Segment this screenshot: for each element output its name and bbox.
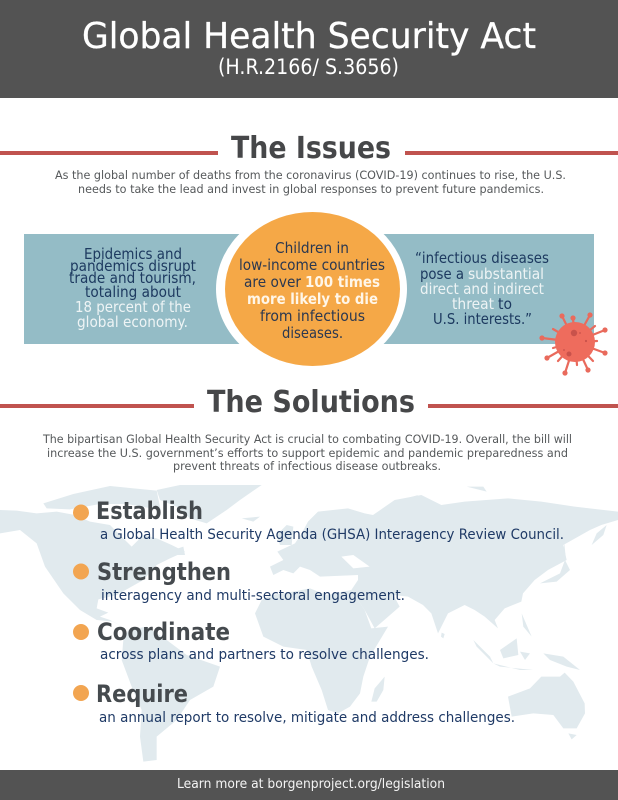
item: Require: Require — [96, 680, 188, 708]
issues intro text: As the global number of deaths from the coronavirus (COVID-19) continues to rise, the U.S. — [55, 168, 566, 182]
text: economy statistic — [69, 246, 196, 331]
panel: issues band — [24, 205, 594, 373]
heading: The Solutions: The Solutions — [207, 385, 415, 420]
item: Establish: a Global Health Security Agenda (GHSA) Interagency Review Council. — [100, 527, 564, 543]
white ring — [216, 205, 407, 373]
solutions intro text: The bipartisan Global Health Security Act is crucial to combating COVID-19. Overall, the bill will — [42, 432, 572, 446]
text: children statistic: are over — [244, 274, 302, 291]
text: threat quote: direct and indirect — [420, 281, 544, 298]
orange circle — [225, 212, 400, 366]
item: Coordinate — [73, 618, 429, 663]
text: economy statistic: trade and tourism, — [69, 270, 196, 287]
world map background — [0, 485, 618, 762]
text: economy statistic: 18 percent of the — [75, 299, 191, 316]
item: Strengthen: interagency and multi-sectoral engagement. — [101, 588, 405, 604]
text: economy statistic: global economy. — [77, 314, 188, 331]
text: threat quote: U.S. interests.” — [433, 311, 532, 328]
text: children statistic: 100 times — [305, 273, 380, 291]
title: Global Health Security Act — [82, 16, 536, 57]
icon: virus — [540, 314, 606, 374]
footer bar: Learn more at borgenproject.org/legislation — [177, 777, 445, 792]
text: children statistic: Children in — [275, 240, 349, 257]
item: Require: an annual report to resolve, mitigate and address challenges. — [99, 710, 515, 726]
text: threat quote — [415, 250, 549, 328]
solutions intro text: prevent threats of infectious disease outbreaks. — [173, 459, 441, 473]
text: economy statistic: pandemics disrupt — [70, 258, 196, 275]
item: Strengthen: Strengthen — [97, 558, 231, 586]
bill numbers subtitle: (H.R.2166/ S.3656) — [218, 55, 399, 79]
text: children statistic: low-income countries — [239, 257, 385, 274]
issues intro text — [55, 168, 566, 196]
heading: The Issues: The Issues — [231, 131, 391, 166]
item: Coordinate: Coordinate — [97, 618, 230, 646]
item: Require — [73, 680, 515, 726]
text: children statistic — [239, 240, 385, 342]
header banner — [0, 0, 618, 98]
issues intro text: needs to take the lead and invest in global responses to prevent future pandemics. — [78, 182, 544, 196]
item: Coordinate: across plans and partners to resolve challenges. — [100, 647, 429, 663]
heading: The Issues — [0, 131, 618, 166]
text: children statistic: diseases. — [282, 325, 343, 342]
item: Strengthen — [73, 558, 405, 604]
text: threat quote: substantial — [468, 266, 544, 283]
text: economy statistic: totaling about — [85, 284, 181, 301]
text: children statistic: more likely to die — [247, 291, 378, 308]
text: threat quote: threat — [452, 296, 494, 313]
footer bar — [0, 770, 618, 800]
item: Establish — [73, 497, 564, 543]
text: threat quote: to — [498, 296, 512, 313]
solutions intro text — [42, 432, 572, 473]
solutions intro text: increase the U.S. government’s efforts to support epidemic and pandemic preparedness and — [47, 446, 568, 460]
text: economy statistic: Epidemics and — [84, 246, 182, 263]
text: children statistic: from infectious — [260, 308, 365, 325]
item: Establish: Establish — [96, 497, 203, 525]
heading: The Solutions — [0, 385, 618, 420]
text: threat quote: “infectious diseases — [415, 250, 549, 267]
text: threat quote: pose a — [420, 266, 464, 283]
